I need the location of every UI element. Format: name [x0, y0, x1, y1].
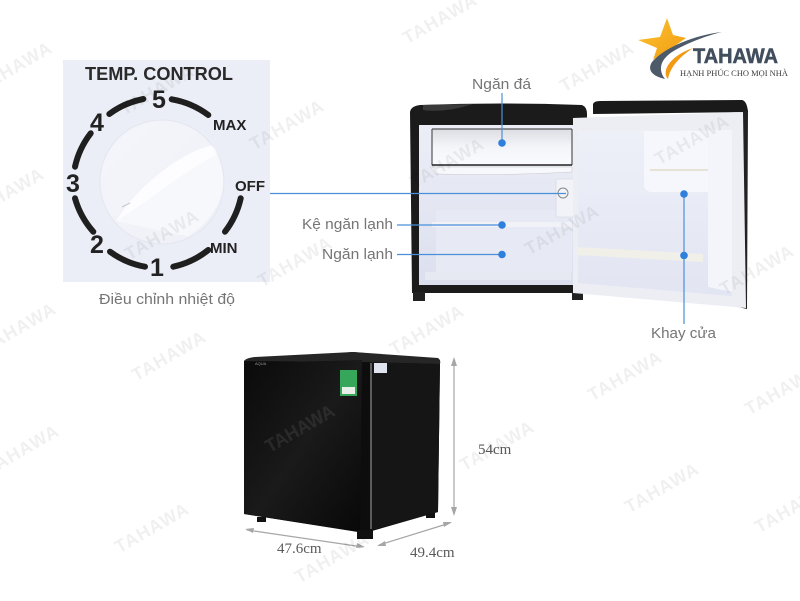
watermarks: TAHAWA: [254, 232, 336, 291]
dial numbers: 1: [150, 254, 164, 282]
dial numbers: 2: [90, 231, 104, 259]
dial text labels: OFF: [235, 178, 265, 195]
logo swoosh gray: [650, 32, 722, 79]
fridge interior: [419, 125, 574, 285]
door liner: [573, 112, 746, 308]
door edge highlight: [370, 363, 372, 529]
callout dots: [498, 139, 688, 259]
watermarks: TAHAWA: [521, 200, 603, 259]
callout lines: [270, 93, 684, 324]
door top cap: [593, 100, 748, 114]
logo star: [638, 18, 686, 60]
watermarks: TAHAWA: [406, 133, 488, 192]
lower compartment: [436, 210, 572, 272]
heading: temp control: TEMP. CONTROL: [85, 64, 233, 84]
watermarks: TAHAWA: [621, 458, 703, 517]
watermarks: TAHAWA: [716, 240, 798, 299]
dial numbers: 3: [66, 170, 80, 198]
freezer compartment: [430, 129, 572, 175]
label: height: 54cm: [478, 442, 512, 458]
brand mark: AQUA: [255, 361, 267, 366]
watermarks: TAHAWA: [584, 346, 666, 405]
logo tagline: HẠNH PHÚC CHO MỌI NHÀ: [680, 68, 789, 78]
caption: dial: Điều chỉnh nhiệt độ: [99, 291, 235, 308]
upper door bin: [644, 131, 708, 192]
dial text labels: [210, 117, 265, 257]
fridge front door: [244, 360, 362, 532]
open fridge: [410, 100, 748, 309]
dimension arrows: [245, 357, 457, 548]
logo swoosh orange: [666, 48, 693, 79]
watermarks: TAHAWA: [121, 205, 203, 264]
watermarks: TAHAWA: [456, 416, 538, 475]
label: fridge compartment: Ngăn lạnh: [322, 246, 393, 263]
lower door shelf: [577, 247, 703, 262]
arrow: depth: [377, 522, 452, 546]
dial text labels: MIN: [210, 240, 238, 257]
fridge top: [244, 352, 440, 364]
watermarks: TAHAWA: [128, 326, 210, 385]
closed fridge: [244, 352, 440, 539]
logo wordmark: TAHAWA: [693, 45, 778, 68]
watermarks: TAHAWA: [651, 110, 733, 169]
watermarks: TAHAWA: [556, 37, 638, 96]
dial text labels: MAX: [213, 117, 246, 134]
label: freezer: Ngăn đá: [472, 76, 532, 93]
label: door tray: Khay cửa: [651, 325, 717, 342]
label: depth: 49.4cm: [410, 545, 455, 561]
watermarks: TAHAWA: [386, 300, 468, 359]
watermarks: TAHAWA: [291, 528, 373, 587]
watermarks: TAHAWA: [246, 95, 328, 154]
fridge feet: [257, 513, 435, 539]
fridge side: [370, 362, 440, 530]
panel: temperature dial: [63, 60, 270, 282]
dial knob: [100, 120, 224, 244]
dial numbers: [66, 86, 166, 282]
watermarks: TAHAWA: [111, 498, 193, 557]
shelf: [432, 222, 572, 227]
door inner cavity: [578, 130, 732, 296]
fridge backing: [244, 352, 440, 532]
energy label: [340, 370, 357, 396]
thermostat housing: [556, 179, 575, 217]
bottom tray: [425, 272, 571, 280]
label: shelf: Kệ ngăn lạnh: [302, 216, 393, 233]
dial numbers: 5: [152, 86, 166, 114]
dial scale arcs: [75, 99, 241, 267]
spec sticker: [374, 363, 387, 373]
watermarks: TAHAWA: [116, 60, 198, 119]
door side strip: [708, 130, 732, 292]
fridge-front watermark: TAHAWA: [262, 401, 338, 457]
arrow: height: [451, 357, 457, 516]
arrow: width: [245, 528, 365, 548]
fridge body: [410, 104, 587, 301]
door edge: [738, 110, 748, 309]
label: width: 47.6cm: [277, 541, 322, 557]
dial numbers: 4: [90, 109, 104, 137]
logo: [638, 18, 789, 79]
